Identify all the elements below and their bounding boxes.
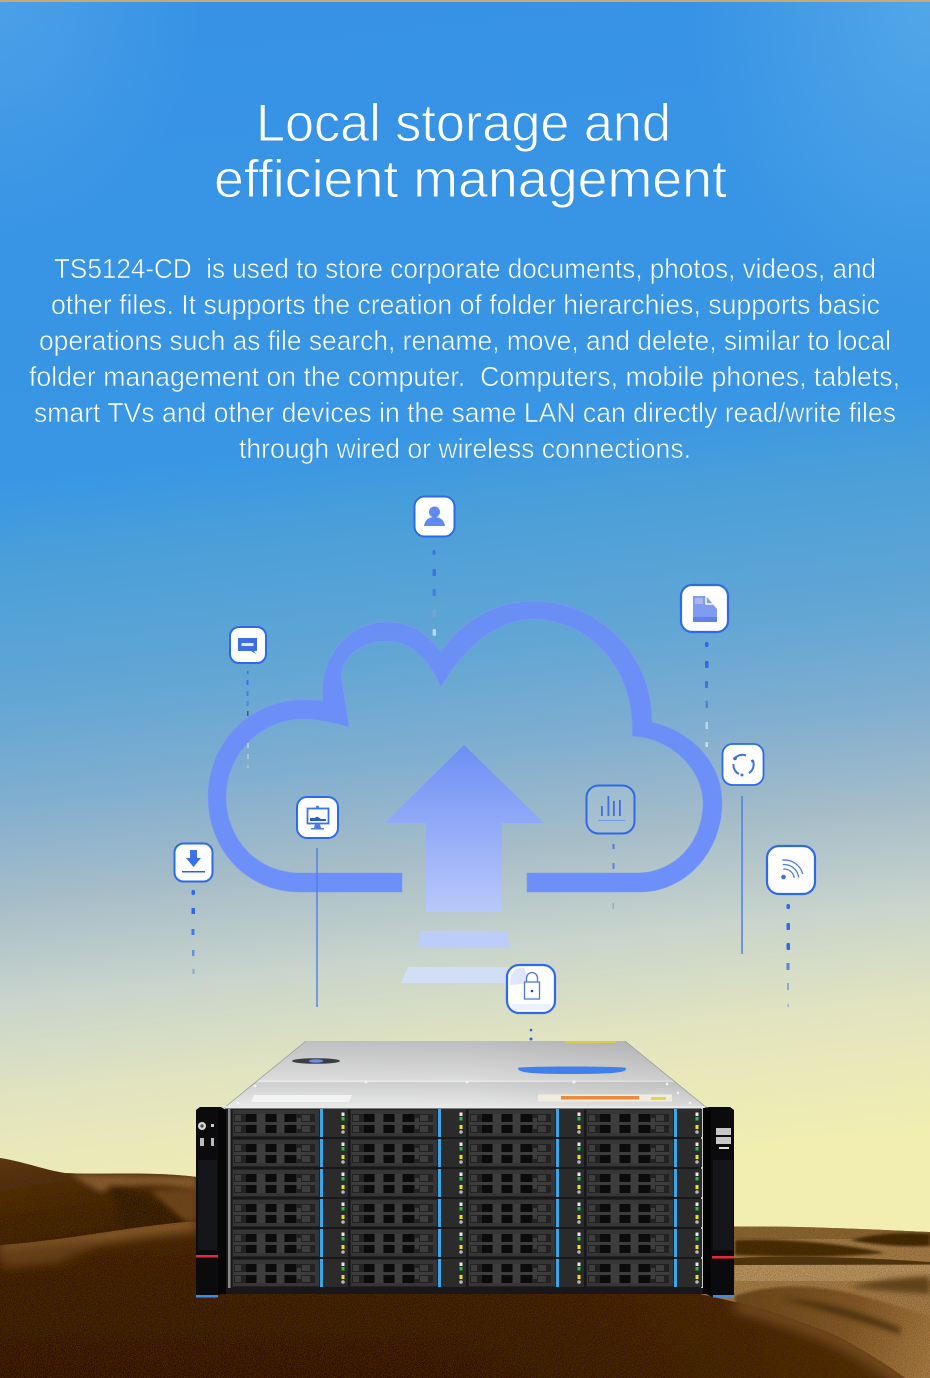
connector: chart dots bbox=[612, 844, 614, 909]
cloud outline bbox=[208, 601, 722, 892]
icon: download bbox=[174, 844, 212, 882]
description text block: through wired or wireless connections. bbox=[239, 433, 691, 464]
upload arrow bbox=[385, 745, 544, 912]
description text block: folder management on the computer. Computers, mobile phones, tablets, bbox=[29, 361, 900, 392]
connector: user dots bbox=[432, 550, 436, 636]
connector: lock dots bbox=[530, 1029, 532, 1040]
server: drive bays bbox=[232, 1109, 702, 1287]
title: Local storage and bbox=[256, 94, 671, 153]
icon: sync bbox=[722, 744, 764, 785]
dunes: right horizon layers bbox=[700, 1225, 930, 1378]
arrow trail bars bbox=[401, 931, 510, 983]
icon: lock bbox=[507, 965, 555, 1013]
dunes: left back hill bbox=[0, 1158, 196, 1245]
server: front chassis bbox=[225, 1106, 705, 1294]
description text block: operations such as file search, rename, move, and delete, similar to local bbox=[39, 325, 891, 356]
icon: bar chart bbox=[586, 786, 634, 834]
title: efficient management bbox=[214, 150, 727, 209]
connector: comment dots bbox=[246, 671, 249, 768]
icon: wifi bbox=[767, 846, 815, 894]
server: top panel bbox=[223, 1041, 707, 1108]
connector: sync line bbox=[741, 796, 743, 954]
server: NAS storage unit bbox=[196, 1041, 734, 1298]
icon: user bbox=[414, 496, 454, 536]
title bbox=[214, 94, 727, 209]
description text block bbox=[29, 253, 900, 464]
icon: comment bbox=[230, 627, 266, 663]
description text block: TS5124-CD is used to store corporate documents, photos, videos, and bbox=[54, 253, 876, 284]
server: left rack ear bbox=[196, 1107, 226, 1298]
background: desert dunes bbox=[0, 1155, 930, 1378]
icon: document bbox=[681, 585, 728, 632]
description text block: smart TVs and other devices in the same LAN can directly read/write files bbox=[34, 397, 896, 428]
connector: wifi dots bbox=[786, 904, 790, 1007]
connector: monitor line bbox=[316, 848, 318, 1007]
server: right rack ear bbox=[703, 1107, 734, 1298]
connector: download dots bbox=[192, 890, 195, 974]
dunes: dark foreground bbox=[0, 1215, 920, 1378]
connector: document dots bbox=[705, 642, 708, 747]
icon: monitor board bbox=[297, 797, 338, 838]
description text block: other files. It supports the creation of folder hierarchies, supports basic bbox=[51, 289, 880, 320]
